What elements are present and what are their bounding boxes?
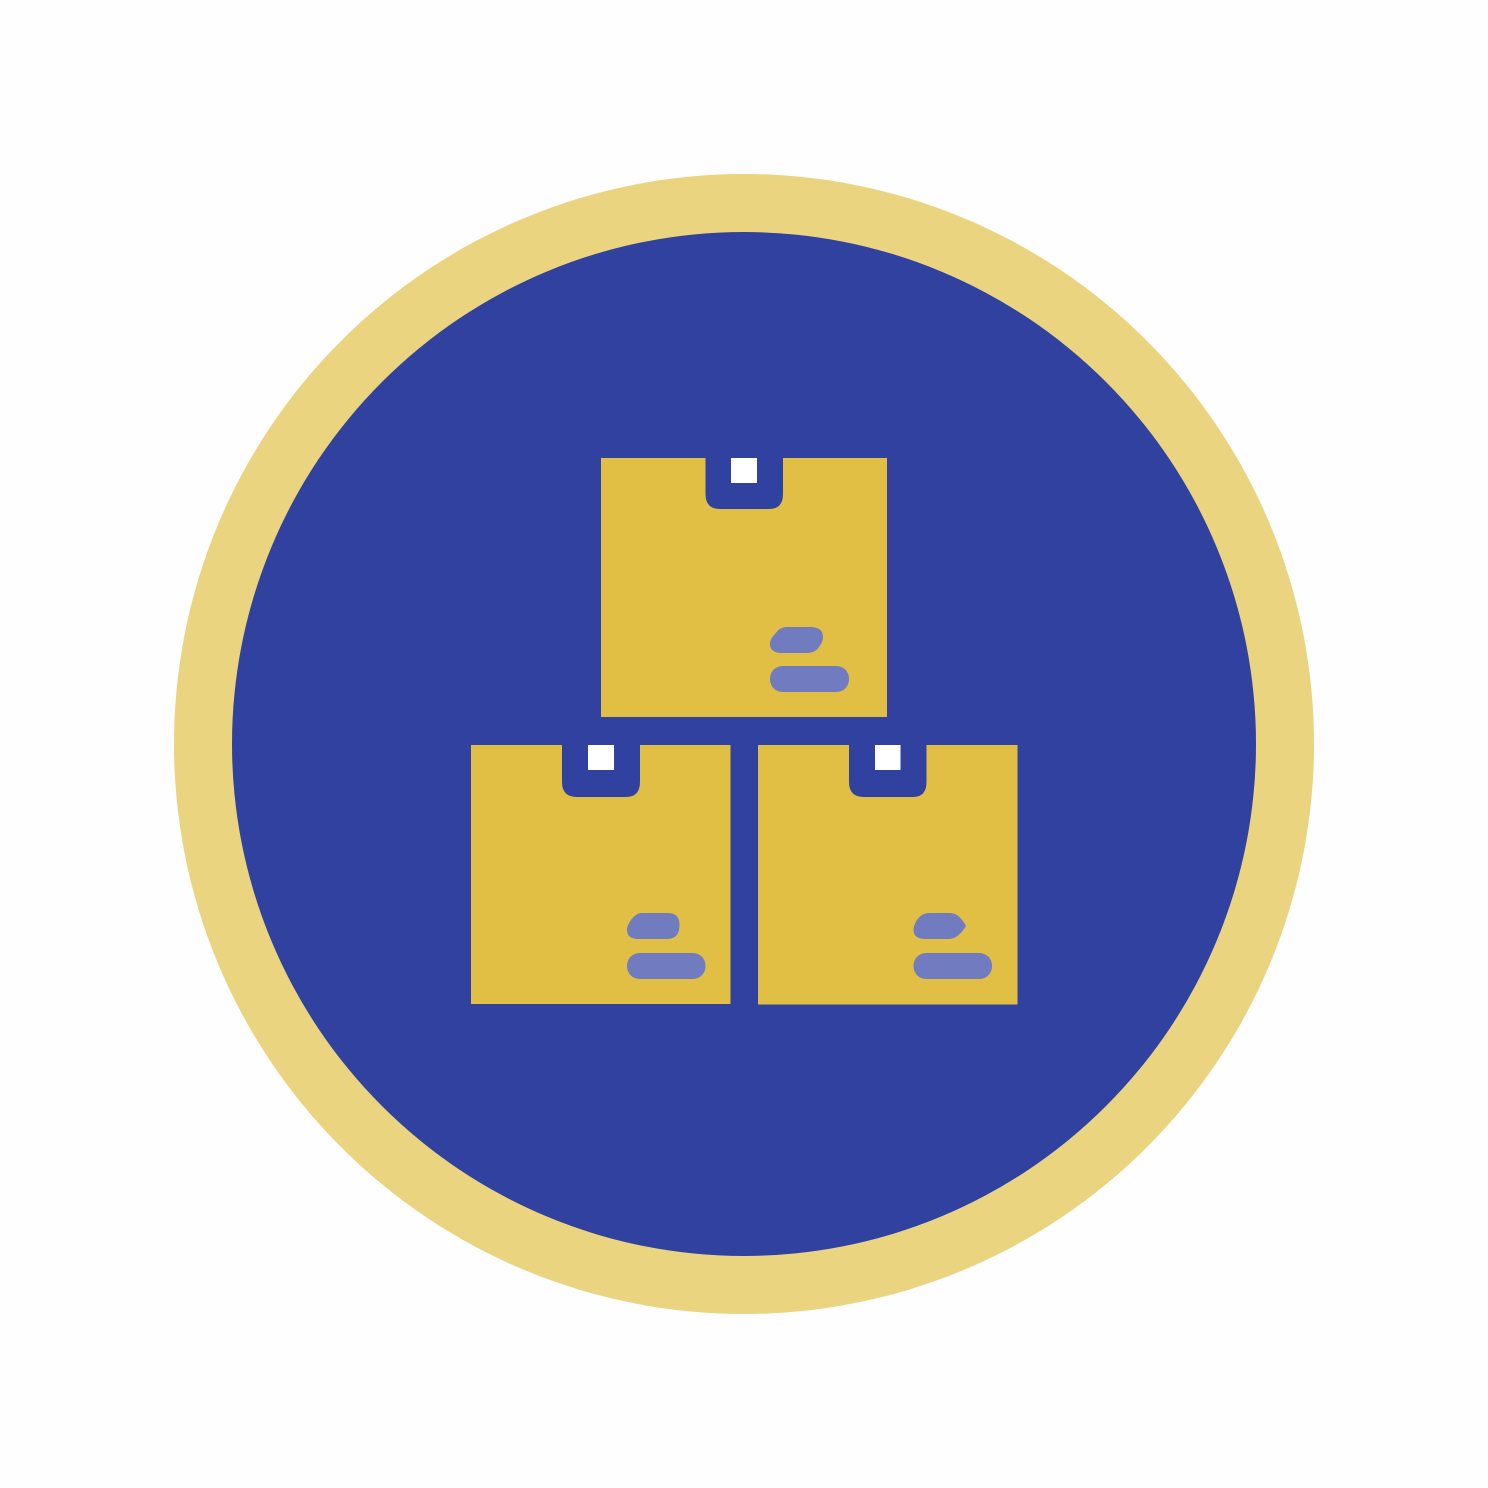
icon: top box	[601, 458, 887, 717]
icon: bottom left box	[471, 745, 730, 1004]
icon: bottom right box	[758, 745, 1018, 1004]
badge inner disc	[232, 232, 1256, 1256]
badge outer ring	[174, 174, 1314, 1314]
